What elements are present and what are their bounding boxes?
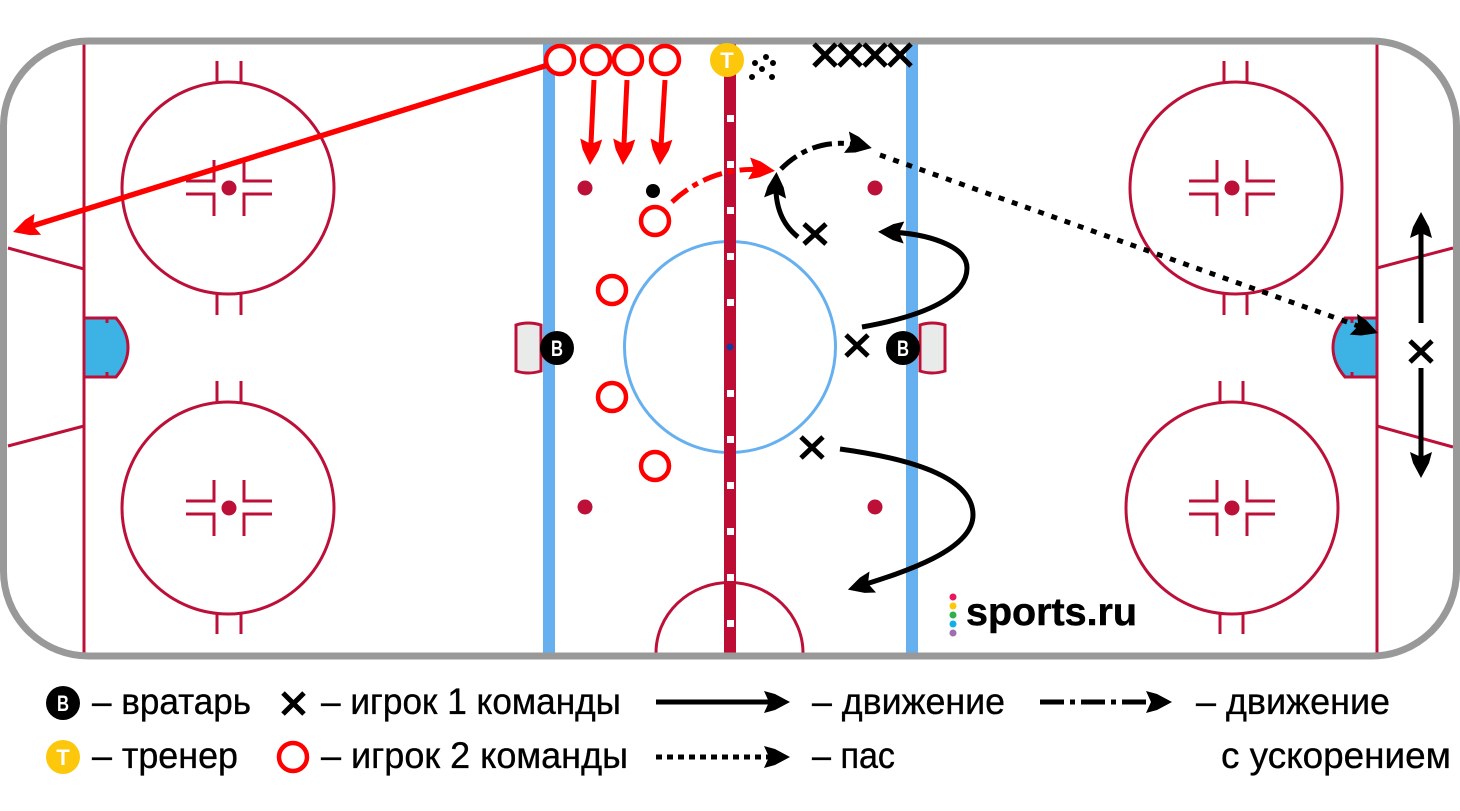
legend: team 2 player: – игрок 2 команды xyxy=(321,735,628,776)
left small goal xyxy=(516,323,541,373)
acceleration arrow xyxy=(672,169,766,202)
acceleration arrow xyxy=(781,143,863,169)
legend: coach: – тренер xyxy=(92,735,238,776)
dotted pass xyxy=(880,155,1370,330)
legend: coach: Т xyxy=(56,745,70,770)
coach marker: Т xyxy=(720,48,734,73)
legend: team 1 player: – игрок 1 команды xyxy=(321,681,621,722)
legend: accelerated movement xyxy=(1040,681,1451,776)
down arrow 3 xyxy=(660,80,665,156)
arrow to center xyxy=(776,181,798,237)
rink lines and face-off markings xyxy=(8,44,1453,653)
legend: movement: – движение xyxy=(812,681,1005,722)
face-off dots xyxy=(222,180,1240,516)
right goalie marker: В xyxy=(897,336,909,361)
black arrows: team 1 movement xyxy=(776,143,1421,587)
down arrow 1 xyxy=(590,80,594,156)
blue lines xyxy=(543,42,918,654)
team 2 players xyxy=(546,46,679,480)
down arrow 2 xyxy=(623,80,627,156)
center red line xyxy=(724,42,736,654)
long pass arrow xyxy=(22,65,548,229)
left goalie marker xyxy=(540,331,574,365)
pucks xyxy=(646,54,776,198)
up arrow xyxy=(1418,221,1424,323)
red arrows: team 2 movement xyxy=(22,65,766,229)
hockey rink xyxy=(4,41,1456,656)
left goal crease xyxy=(84,318,128,377)
legend: accelerated movement: с ускорением xyxy=(1221,735,1451,776)
team 1 players xyxy=(801,44,1432,458)
legend: goalie: – вратарь xyxy=(92,681,251,722)
down arrow xyxy=(1418,368,1424,469)
sports.ru logo: sports.ru xyxy=(966,591,1137,634)
left goalie marker: В xyxy=(551,336,563,361)
legend: goalie: В xyxy=(57,691,69,716)
coach marker xyxy=(710,43,744,77)
legend xyxy=(46,681,1451,776)
legend: pass: – пас xyxy=(812,735,895,776)
center circle xyxy=(624,242,836,452)
legend: accelerated movement: – движение xyxy=(1196,681,1390,722)
rink border xyxy=(4,41,1456,656)
lower curve xyxy=(840,449,973,587)
right goalie marker xyxy=(886,331,920,365)
right goal crease xyxy=(1333,318,1377,377)
upper curve xyxy=(862,232,967,327)
right small goal xyxy=(920,323,945,373)
